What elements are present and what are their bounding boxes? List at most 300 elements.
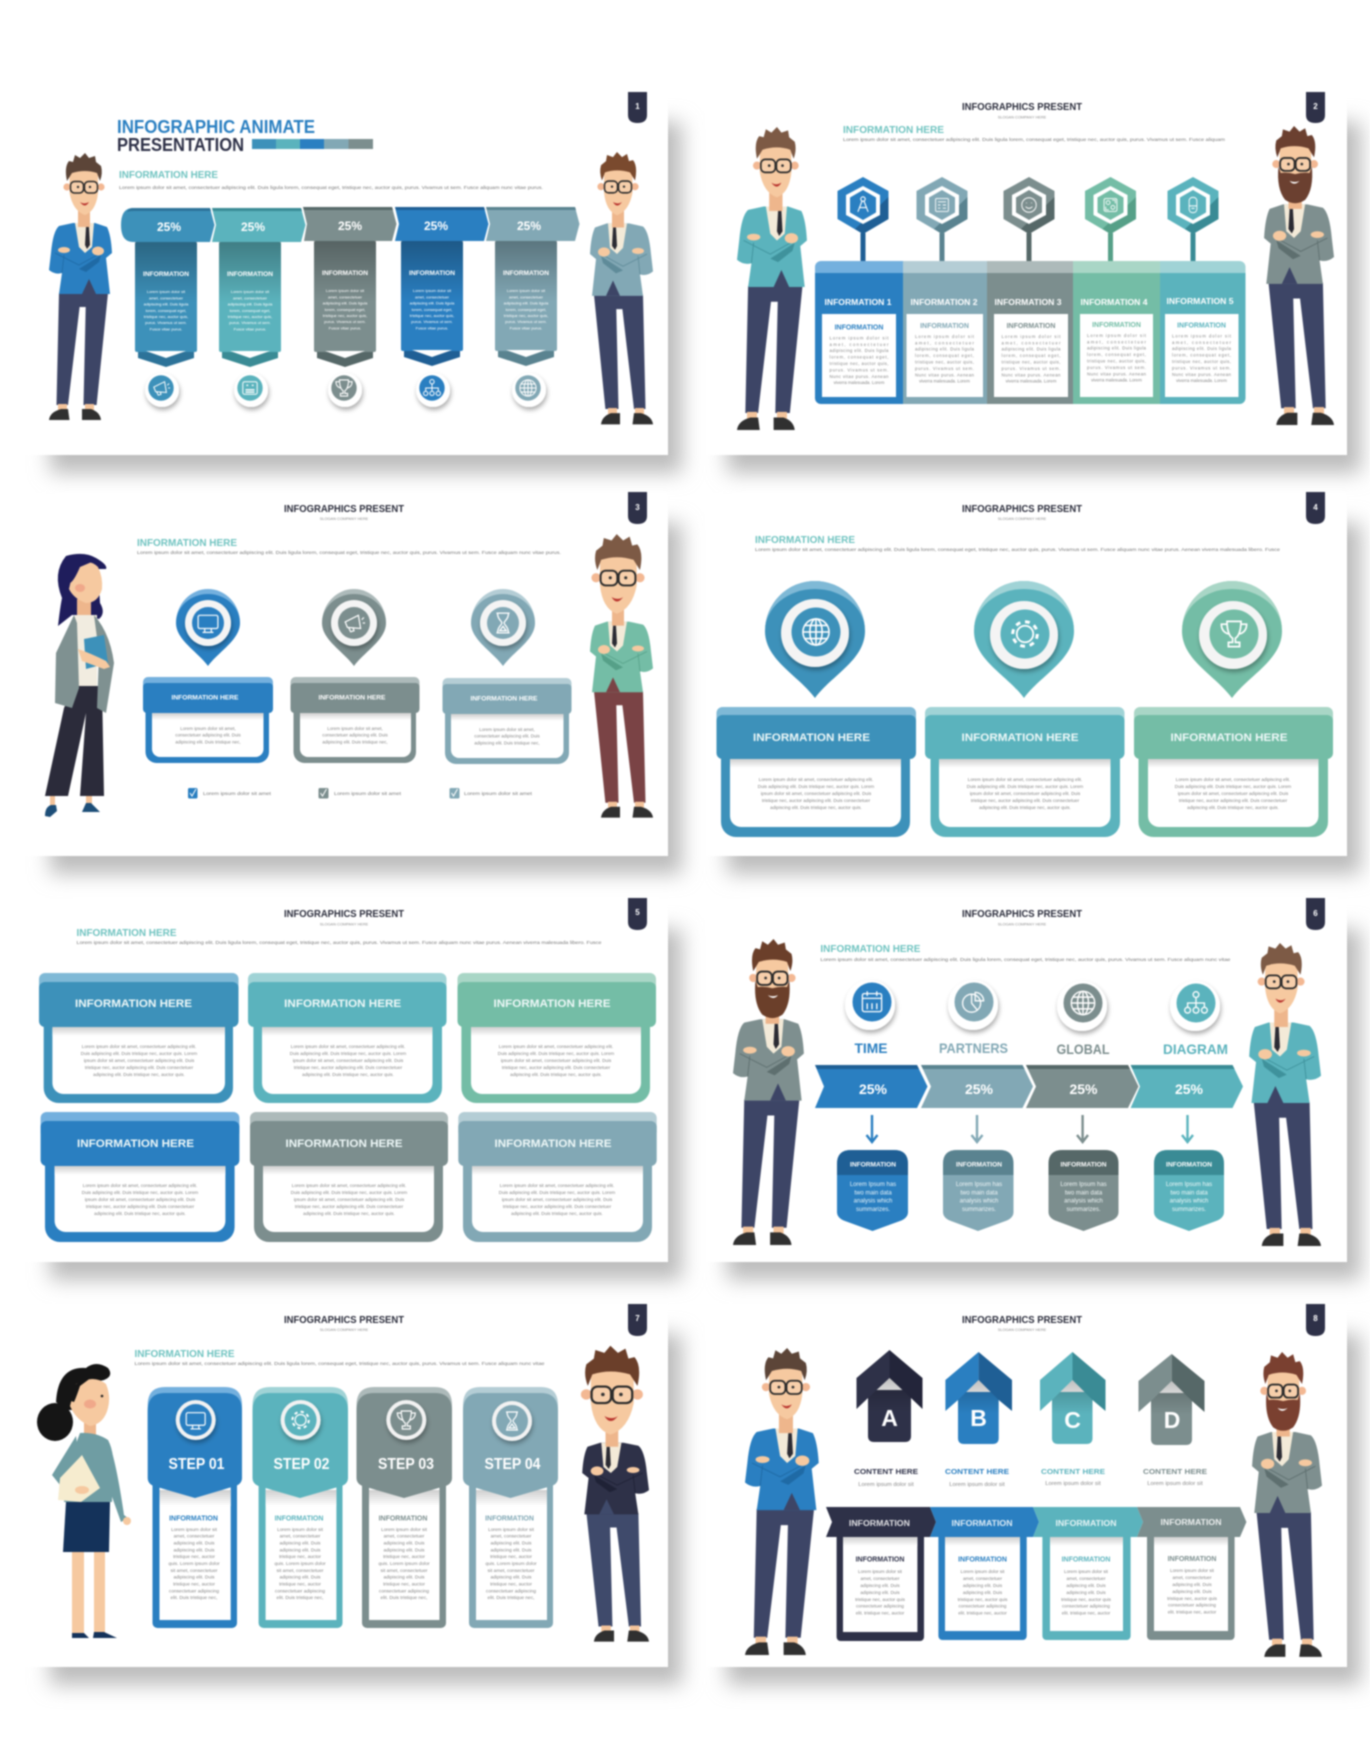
card 2: INFORMATION HERE (962, 732, 1078, 744)
column B: adipiscing elit. Duis (963, 1583, 1003, 1588)
card 2: tristique nec, auctor adipiscing elit. Duis consectetuer (294, 1065, 403, 1070)
step card 4: Lorem ipsum dolor sit (488, 1527, 535, 1533)
step card 1: consectetuer adipiscing (169, 1588, 219, 1594)
shield 1: INFORMATION (850, 1162, 896, 1168)
page number tab 1 (628, 92, 647, 123)
panel: slide 3 (22, 492, 682, 874)
icon: trophy (328, 373, 362, 407)
heading: SLOGAN COMPANY HERE (998, 922, 1047, 926)
panel: slide 2 (705, 92, 1361, 473)
icon: calendar (845, 980, 895, 1030)
step card 2: elit. Duis tristique nec, (277, 1595, 323, 1601)
step card 3: tristique nec, auctor (383, 1554, 425, 1560)
column 4: INFORMATION 4 (1080, 298, 1148, 307)
shield 1: two main data (854, 1190, 892, 1196)
card 3: ipsum dolor sit amet, consectetuer adipiscing elit. Duis (1178, 791, 1289, 796)
shield 4: two main data (1170, 1190, 1208, 1196)
page number tab 7: 7 (635, 1314, 640, 1323)
column D: elit. tristique nec, auctor (1168, 1610, 1217, 1615)
ribbon 5: adipiscing elit. Duis ligula (504, 301, 549, 306)
content label A: CONTENT HERE (854, 1467, 918, 1476)
pin: gear (974, 581, 1074, 698)
ribbon 5: tristique nec, auctor quis, (504, 313, 548, 318)
panel: slide 7 (22, 1304, 682, 1685)
column 3: amet, consectetuer (1002, 340, 1061, 345)
ribbon 3: tristique nec, auctor quis, (323, 313, 367, 318)
step card 1: INFORMATION (169, 1516, 218, 1522)
arrow 2 (972, 1115, 982, 1142)
panel: slide 6 (705, 898, 1361, 1280)
column 5: INFORMATION 5 (1166, 297, 1234, 306)
arrow 4 (1182, 1115, 1193, 1142)
step card 4: consectetuer adipiscing (486, 1588, 536, 1594)
ribbon 1: INFORMATION (143, 271, 189, 278)
ribbon 1: lorem, consequat eget, (146, 308, 186, 313)
heading: SLOGAN COMPANY HERE (320, 516, 369, 521)
percent arrow 2 (212, 208, 306, 242)
column B: Lorem ipsum dolor sit (961, 1569, 1005, 1574)
ribbon 1: purus. Vivamus ut sem. (145, 320, 187, 325)
ribbon 4: INFORMATION (409, 270, 455, 277)
character: bearded man in grey jacket (1252, 1352, 1322, 1657)
heading: SLOGAN COMPANY HERE (998, 1327, 1047, 1332)
page number tab 5 (628, 898, 647, 930)
shield 2 (943, 1150, 1014, 1231)
intro text: Lorem ipsum dolor sit amet, consectetuer adipiscing elit. Duis ligula lorem, consequat eget, tristique nec, auctor quis, purus. Vivamus ut sem. Fusce aliquam (843, 137, 1225, 143)
percent arrow 1: 25% (157, 220, 181, 234)
chevron 2 (921, 1065, 1033, 1108)
column C: amet, consectetuer (1066, 1576, 1106, 1581)
shield 2: INFORMATION (956, 1162, 1002, 1168)
intro text: Lorem ipsum dolor sit amet, consectetuer adipiscing elit. Duis ligula lorem, consequat eget, tristique nec, auctor quis, purus. Vivamus ut sem. Fusce aliquam nunc vitae purus. Aenean viverra malesuada libero. Fusce (76, 940, 602, 946)
step card 4 (463, 1387, 558, 1628)
ribbon 4: Fusce vitae purus. (416, 325, 448, 330)
card 5: INFORMATION HERE (286, 1138, 402, 1150)
page number tab 2 (1306, 92, 1325, 123)
ribbon 3: lorem, consequat eget, (325, 307, 365, 312)
column 1: Nunc vitae purus. Aenean (830, 374, 889, 379)
column 4: INFORMATION (1092, 322, 1141, 329)
column 1: INFORMATION 1 (824, 298, 892, 307)
card 3: INFORMATION HERE (1170, 732, 1288, 744)
step card 1: adipiscing elit. Duis (173, 1547, 215, 1553)
up arrow B (945, 1352, 1012, 1444)
column 5: lorem, consequat eget, (1172, 353, 1231, 358)
content label C: Lorem ipsum dolor sit (1045, 1481, 1101, 1487)
column colours (815, 261, 1246, 404)
intro text: Lorem ipsum dolor sit amet, consectetuer adipiscing elit. Duis ligula lorem, consequat eget, tristique nec, auctor quis, purus. Vivamus ut sem. Fusce aliquam nunc vitae (134, 1361, 545, 1367)
card 2: consectetuer adipiscing elit. Duis (322, 733, 389, 738)
column 4: lorem, consequat eget, (1087, 352, 1146, 357)
column 3: INFORMATION 3 (994, 298, 1062, 307)
card 3: INFORMATION HERE (470, 696, 538, 702)
subheading: INFORMATION HERE (134, 1349, 235, 1360)
card 3 (458, 973, 656, 1103)
step card 2: INFORMATION (275, 1516, 323, 1522)
intro text: Lorem ipsum dolor sit amet, consectetuer adipiscing elit. Duis ligula lorem, consequat eget, tristique nec, auctor quis, purus. Vivamus ut sem. Fusce aliquam nunc vitae (820, 957, 1231, 963)
shield 2: Lorem Ipsum has (956, 1182, 1002, 1188)
character: woman with papers (37, 1364, 131, 1638)
character: man in green jacket (590, 534, 653, 818)
column 2: INFORMATION 2 (910, 298, 978, 307)
card 3: tristique nec, auctor adipiscing elit. Duis consectetuer (1179, 798, 1288, 803)
icon: network (416, 373, 450, 407)
step card 1: adipiscing elit. Duis (173, 1575, 215, 1581)
column 5: Nunc vitae purus. Aenean (1172, 372, 1232, 377)
card 6: tristique nec, auctor adipiscing elit. Duis consectetuer (503, 1204, 612, 1209)
shield 3: INFORMATION (1060, 1162, 1107, 1168)
page number tab 2: 2 (1313, 102, 1318, 111)
shield 2: two main data (960, 1190, 998, 1196)
content label B: CONTENT HERE (945, 1467, 1009, 1476)
percent arrow 4 (395, 207, 488, 241)
column C: tristique nec, auctor quis (1061, 1597, 1112, 1602)
column 3: adipiscing elit. Duis ligula (1002, 347, 1061, 352)
arrow 3 (1077, 1115, 1088, 1142)
heading (284, 504, 404, 521)
character: man in light jacket (590, 152, 653, 424)
step card 3: STEP 03 (378, 1456, 434, 1473)
heading: SLOGAN COMPANY HERE (998, 114, 1047, 120)
card 2: Lorem ipsum dolor sit amet, consectetuer adipiscing elit. (968, 777, 1082, 782)
card 6: adipiscing elit. Duis tristique nec, auctor quis. (511, 1211, 603, 1216)
step card 1: sit amet, consectetuer (171, 1568, 218, 1574)
percent arrow 1 (121, 208, 214, 242)
card 4: adipiscing elit. Duis tristique nec, auctor quis. (94, 1211, 186, 1216)
percent arrow 5 (486, 207, 580, 241)
icon: globe (512, 373, 546, 407)
label: partners: PARTNERS (939, 1040, 1008, 1056)
step card 3: adipiscing elit. Duis (383, 1547, 425, 1553)
column C: elit. tristique nec, auctor (1062, 1611, 1111, 1616)
heading (962, 1315, 1082, 1332)
column 1: Lorem ipsum dolor sit (830, 335, 889, 340)
panel: slide 4 (705, 492, 1361, 874)
percent arrow 4: 25% (424, 219, 448, 233)
content label D: Lorem ipsum dolor sit (1147, 1481, 1203, 1487)
chevron 4: 25% (1175, 1081, 1204, 1097)
chevron 3: 25% (1069, 1081, 1098, 1097)
column D: Lorem ipsum dolor sit (1170, 1568, 1215, 1573)
page number tab 1: 1 (635, 102, 640, 111)
page number tab 3 (628, 492, 647, 524)
shield 2: summarizes. (962, 1207, 996, 1213)
icon: network (1170, 981, 1220, 1031)
card 1: ipsum dolor sit amet, consectetuer adipiscing elit. Duis (761, 791, 872, 796)
column 4: purus. Vivamus ut sem. (1087, 365, 1146, 370)
table: five information columns (815, 261, 1246, 404)
ribbon 2: Lorem ipsum dolor sit (231, 289, 270, 294)
column 2: adipiscing elit. Duis ligula (915, 347, 975, 352)
card 1: ipsum dolor sit amet, consectetuer adipiscing elit. Duis (84, 1058, 195, 1063)
step card 4: quis. Lorem ipsum dolor (485, 1561, 537, 1567)
shield 4 (1154, 1150, 1224, 1231)
column C: Lorem ipsum dolor sit (1064, 1569, 1109, 1574)
heading: SLOGAN COMPANY HERE (998, 516, 1047, 521)
ribbon 2 (219, 242, 281, 367)
heading (284, 1315, 404, 1332)
shield 1: analysis which (854, 1199, 892, 1205)
card 3: Lorem ipsum dolor sit amet, (479, 727, 535, 732)
column 4: Nunc vitae purus. Aenean (1087, 371, 1147, 376)
column 2: lorem, consequat eget, (915, 353, 974, 358)
ribbon 2: adipiscing elit. Duis ligula (228, 302, 273, 307)
heading: SLOGAN COMPANY HERE (320, 1327, 369, 1332)
card 1: consectetuer adipiscing elit. Duis (175, 733, 242, 738)
ribbon 3: INFORMATION (322, 270, 368, 277)
page number tab 6 (1306, 898, 1325, 930)
card 3: adipiscing elit. Duis tristique nec, auctor quis. (510, 1072, 602, 1077)
ribbon 4: amet, consectetuer (415, 294, 450, 299)
step card 1: amet, consectetuer (174, 1534, 215, 1540)
step card 3: adipiscing elit. Duis (383, 1575, 425, 1581)
subheading: INFORMATION HERE (755, 535, 855, 546)
heading (962, 102, 1082, 120)
column 4 (1080, 298, 1153, 397)
card 2: Lorem ipsum dolor sit amet, consectetuer adipiscing elit. (291, 1044, 405, 1049)
card 3 (1134, 707, 1333, 837)
chevron 2: 25% (965, 1081, 994, 1097)
title (117, 117, 315, 155)
ribbon 5: Lorem ipsum dolor sit (507, 288, 546, 293)
card 4: tristique nec, auctor adipiscing elit. Duis consectetuer (86, 1204, 195, 1209)
hexagon icon 4 (1085, 177, 1136, 262)
page number tab 6: 6 (1313, 909, 1318, 918)
checkbox item 1: Lorem ipsum dolor sit amet (203, 791, 272, 797)
card 1: tristique nec, auctor adipiscing elit. Duis consectetuer (85, 1065, 194, 1070)
card 4: Lorem ipsum dolor sit amet, consectetuer adipiscing elit. (83, 1183, 197, 1188)
column A: adipiscing elit. Duis (860, 1583, 900, 1588)
content label D: CONTENT HERE (1143, 1467, 1207, 1476)
column A: INFORMATION (849, 1519, 910, 1528)
column 3: Nunc vitae purus. Aenean (1002, 372, 1061, 377)
heading: SLOGAN COMPANY HERE (320, 922, 369, 926)
card 3: consectetuer adipiscing elit. Duis (474, 734, 541, 739)
column D: amet, consectetuer (1172, 1575, 1212, 1580)
heading: INFOGRAPHICS PRESENT (962, 909, 1082, 920)
pin: hourglass (471, 589, 535, 666)
page number tab 7 (628, 1304, 647, 1336)
ribbon 2: tristique nec, auctor quis, (228, 314, 272, 319)
step card 4: adipiscing elit. Duis (490, 1547, 532, 1553)
up arrow C (1040, 1352, 1106, 1444)
card 6: Duis adipiscing elit. Duis tristique nec, auctor quis. Lorem (499, 1190, 615, 1195)
column 1: adipiscing elit. Duis ligula (830, 348, 889, 353)
card 3: tristique nec, auctor adipiscing elit. Duis consectetuer (502, 1065, 611, 1070)
shield 4: summarizes. (1172, 1207, 1206, 1213)
card 3: Lorem ipsum dolor sit amet, consectetuer adipiscing elit. (1176, 777, 1290, 782)
step card 2: adipiscing elit. Duis (279, 1575, 321, 1581)
intro text: Lorem ipsum dolor sit amet, consectetuer adipiscing elit. Duis ligula lorem, consequat eget, tristique nec, auctor quis, purus. Vivamus ut sem. Fusce aliquam nunc vitae purus. (119, 185, 543, 191)
step card 1 (148, 1387, 242, 1628)
card 1: adipiscing elit. Duis tristique nec, (175, 739, 241, 744)
column C: INFORMATION (1062, 1556, 1110, 1564)
ribbon 1: amet, consectetuer (149, 295, 184, 300)
panel: slide 8 (705, 1304, 1361, 1685)
step card 2: tristique nec, auctor (279, 1554, 321, 1560)
character: man in blue jacket (745, 1348, 819, 1655)
shield 3: Lorem Ipsum has (1060, 1182, 1107, 1188)
step card 2: STEP 02 (274, 1456, 330, 1473)
column 2: Nunc vitae purus. Aenean (915, 372, 975, 377)
column 5: adipiscing elit. Duis ligula (1172, 346, 1232, 351)
step card 4: tristique nec, auctor (490, 1554, 532, 1560)
shield 1 (837, 1150, 908, 1231)
column 3: Lorem ipsum dolor sit (1002, 334, 1061, 339)
content label C: CONTENT HERE (1041, 1467, 1105, 1476)
column 5: amet, consectetuer (1172, 340, 1232, 345)
column C: adipiscing elit. Duis (1066, 1590, 1106, 1595)
hexagon icon 3 (1004, 177, 1054, 262)
up arrow D: D (1164, 1407, 1180, 1433)
column 2: viverra malesuada. Lorem (919, 379, 970, 384)
heading (962, 909, 1082, 926)
column C: consectetuer adipiscing (1062, 1604, 1110, 1609)
card 1: INFORMATION HERE (753, 732, 870, 744)
card 3: adipiscing elit. Duis tristique nec, (474, 740, 540, 745)
step card 4: sit amet, consectetuer (488, 1568, 535, 1574)
heading (962, 504, 1082, 521)
column 1: tristique nec, auctor quis, (830, 361, 888, 366)
column 2 (906, 298, 983, 397)
ribbon 1: adipiscing elit. Duis ligula (144, 302, 189, 307)
column B: INFORMATION (952, 1519, 1013, 1528)
heading: INFOGRAPHICS PRESENT (284, 504, 404, 515)
page number tab 4: 4 (1313, 503, 1318, 512)
step card 2: sit amet, consectetuer (277, 1568, 324, 1574)
card 2 (248, 973, 446, 1103)
step card 4: adipiscing elit. Duis (490, 1540, 532, 1546)
subheading: INFORMATION HERE (820, 944, 921, 955)
shield 3 (1048, 1150, 1118, 1231)
up arrow A (856, 1350, 922, 1442)
card 2: tristique nec, auctor adipiscing elit. Duis consectetuer (971, 798, 1080, 803)
column 1: purus. Vivamus ut sem. (830, 367, 888, 372)
character: bearded man in grey jacket (733, 939, 804, 1245)
up arrow A: A (881, 1405, 898, 1431)
column 3 (994, 298, 1068, 397)
card 1: Duis adipiscing elit. Duis tristique nec, auctor quis. Lorem (81, 1051, 197, 1056)
column 1: viverra malesuada. Lorem (834, 380, 885, 385)
percent arrow 2: 25% (241, 220, 265, 234)
column C (1033, 1507, 1143, 1640)
up arrow D (1138, 1354, 1204, 1445)
card 2: INFORMATION HERE (318, 694, 386, 702)
column 5: Lorem ipsum dolor sit (1172, 333, 1232, 338)
checkbox item 2 (318, 788, 402, 798)
content label A (854, 1467, 918, 1488)
card 5: Lorem ipsum dolor sit amet, consectetuer adipiscing elit. (292, 1183, 406, 1188)
step card 1: STEP 01 (168, 1456, 225, 1473)
shield 2: analysis which (960, 1199, 998, 1205)
card 1: INFORMATION HERE (75, 998, 192, 1010)
card 4 (41, 1112, 239, 1242)
column B: consectetuer adipiscing (958, 1604, 1007, 1609)
percent arrow 3: 25% (338, 219, 362, 233)
checkbox item 2: Lorem ipsum dolor sit amet (334, 791, 402, 797)
card 2: Duis adipiscing elit. Duis tristique nec, auctor quis. Lorem (290, 1051, 406, 1056)
ribbon 4 (401, 241, 463, 366)
ribbon 2: lorem, consequat eget, (230, 308, 270, 313)
column D: INFORMATION (1160, 1518, 1222, 1527)
step card 1: elit. Duis tristique nec, (171, 1595, 217, 1601)
shield 1: Lorem Ipsum has (850, 1182, 896, 1188)
ribbon 1: Lorem ipsum dolor sit (147, 289, 186, 294)
column 2: INFORMATION (920, 323, 969, 330)
card 1: Lorem ipsum dolor sit amet, consectetuer adipiscing elit. (759, 777, 873, 782)
step card 2: amet, consectetuer (280, 1534, 321, 1540)
column 4: viverra malesuada. Lorem (1091, 378, 1142, 383)
step card 3: quis. Lorem ipsum dolor (378, 1561, 430, 1567)
column 5: tristique nec, auctor quis, (1172, 359, 1231, 364)
pin: monitor (176, 589, 240, 666)
column 1: lorem, consequat eget, (830, 355, 888, 360)
subheading: INFORMATION HERE (843, 125, 944, 136)
ribbon 1: tristique nec, auctor quis, (144, 314, 188, 319)
column 4: adipiscing elit. Duis ligula (1087, 346, 1147, 351)
column 4: tristique nec, auctor quis, (1087, 358, 1146, 364)
ribbon 5: Fusce vitae purus. (510, 325, 542, 330)
step card 1: quis. Lorem ipsum dolor (168, 1561, 220, 1567)
page number tab 4 (1306, 492, 1325, 524)
percent arrow 3 (303, 207, 396, 241)
card 5: adipiscing elit. Duis tristique nec, auctor quis. (303, 1211, 395, 1216)
card 2 (925, 707, 1124, 837)
card 5: ipsum dolor sit amet, consectetuer adipiscing elit. Duis (294, 1197, 405, 1202)
column 5: viverra malesuada. Lorem (1176, 378, 1227, 383)
chevron 1: 25% (859, 1081, 888, 1097)
card 5: Duis adipiscing elit. Duis tristique nec, auctor quis. Lorem (291, 1190, 407, 1195)
hexagon icon 5 (1168, 177, 1218, 262)
icon: pie (948, 980, 998, 1030)
heading: INFOGRAPHICS PRESENT (962, 504, 1082, 515)
ribbon 3: purus. Vivamus ut sem. (324, 319, 366, 324)
column 3: INFORMATION (1007, 323, 1055, 330)
card 1: tristique nec, auctor adipiscing elit. Duis consectetuer (762, 798, 871, 803)
subheading: INFORMATION HERE (137, 538, 237, 549)
icon: trophy (386, 1400, 426, 1440)
character: man in teal jacket (1249, 943, 1321, 1246)
step card 4: STEP 04 (484, 1456, 541, 1473)
step card 3: sit amet, consectetuer (381, 1568, 428, 1574)
column A: amet, consectetuer (860, 1576, 900, 1581)
column 4: Lorem ipsum dolor sit (1087, 333, 1147, 338)
ribbon 4: Lorem ipsum dolor sit (413, 288, 452, 293)
card 1: Lorem ipsum dolor sit amet, consectetuer adipiscing elit. (82, 1044, 196, 1049)
card 2: INFORMATION HERE (284, 998, 401, 1010)
icon: robot (234, 373, 268, 407)
column D: adipiscing elit. Duis (1172, 1589, 1212, 1594)
card 6: ipsum dolor sit amet, consectetuer adipiscing elit. Duis (502, 1197, 613, 1202)
card 3: Duis adipiscing elit. Duis tristique nec, auctor quis. Lorem (498, 1051, 614, 1056)
column D: tristique nec, auctor quis (1167, 1596, 1218, 1601)
column 2: Lorem ipsum dolor sit (915, 334, 975, 339)
step card 4: tristique nec, auctor (490, 1581, 532, 1587)
card 2: adipiscing elit. Duis tristique nec, (322, 739, 388, 744)
card 1: Lorem ipsum dolor sit amet, (180, 726, 236, 731)
step card 4: INFORMATION (485, 1516, 534, 1522)
step card 3: INFORMATION (379, 1516, 427, 1522)
shield 1: summarizes. (856, 1207, 890, 1213)
ribbon 5: purus. Vivamus ut sem. (505, 319, 547, 324)
card 2 (290, 677, 420, 763)
column D: adipiscing elit. Duis (1172, 1582, 1212, 1587)
arrow 1 (866, 1115, 878, 1142)
character: man in blue jacket (49, 153, 112, 420)
column A: adipiscing elit. Duis (860, 1590, 900, 1595)
card 4: ipsum dolor sit amet, consectetuer adipiscing elit. Duis (85, 1197, 196, 1202)
ribbon 3: Lorem ipsum dolor sit (326, 288, 365, 293)
